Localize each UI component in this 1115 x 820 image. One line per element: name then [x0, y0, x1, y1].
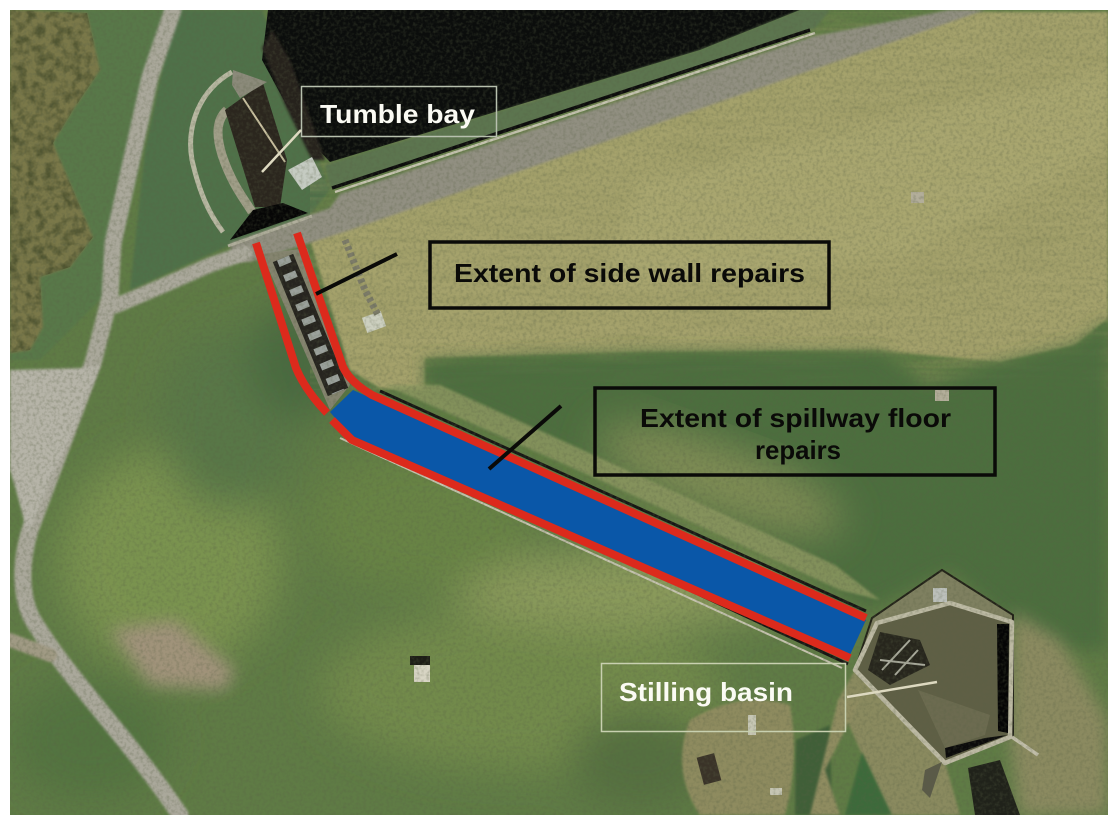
- tumble bay structure: [191, 70, 322, 246]
- stilling basin: [855, 570, 1038, 815]
- reservoir: [262, 10, 800, 162]
- callout: tumble bay: [262, 86, 496, 172]
- track and left road: [10, 10, 245, 815]
- spillway stepped chute: [262, 248, 350, 410]
- bare patch: [110, 620, 235, 690]
- callout: extent of side wall repairs: [316, 242, 829, 308]
- callout: tumble bay: Tumble bay: [320, 99, 476, 129]
- spillway floor repairs (blue): [330, 390, 866, 655]
- road junction apron: [10, 365, 100, 535]
- dark strip below field: [425, 320, 1108, 650]
- callout: extent of spillway floor repairs: repairs: [755, 435, 841, 465]
- patch between track and tumble bay: [130, 10, 330, 290]
- lower channel edge: [694, 594, 849, 666]
- crest road: [230, 10, 985, 262]
- wall along dam: [332, 30, 810, 188]
- callout: extent of spillway floor repairs: [489, 388, 995, 475]
- upper channel edge: [380, 391, 866, 611]
- mid field lighter area: [586, 403, 854, 557]
- callout: extent of spillway floor repairs: Extent of spillway floor: [640, 403, 951, 433]
- small buildings: [362, 192, 949, 682]
- field-coloured bank beside spillway: [385, 385, 880, 600]
- upper left green patch: [10, 10, 175, 360]
- hardstanding near basin: [682, 670, 960, 815]
- dam grass embankment: [325, 10, 830, 188]
- scrub bushes: [10, 10, 105, 355]
- callout: stilling basin: [602, 664, 937, 732]
- step structure beside side wall: [345, 240, 378, 315]
- callout: stilling basin: Stilling basin: [619, 677, 793, 707]
- field right of basin: [1010, 612, 1108, 815]
- side wall repairs (red): [256, 233, 866, 658]
- upper right field: [310, 12, 1108, 390]
- callout: extent of side wall repairs: Extent of side wall repairs: [454, 258, 805, 288]
